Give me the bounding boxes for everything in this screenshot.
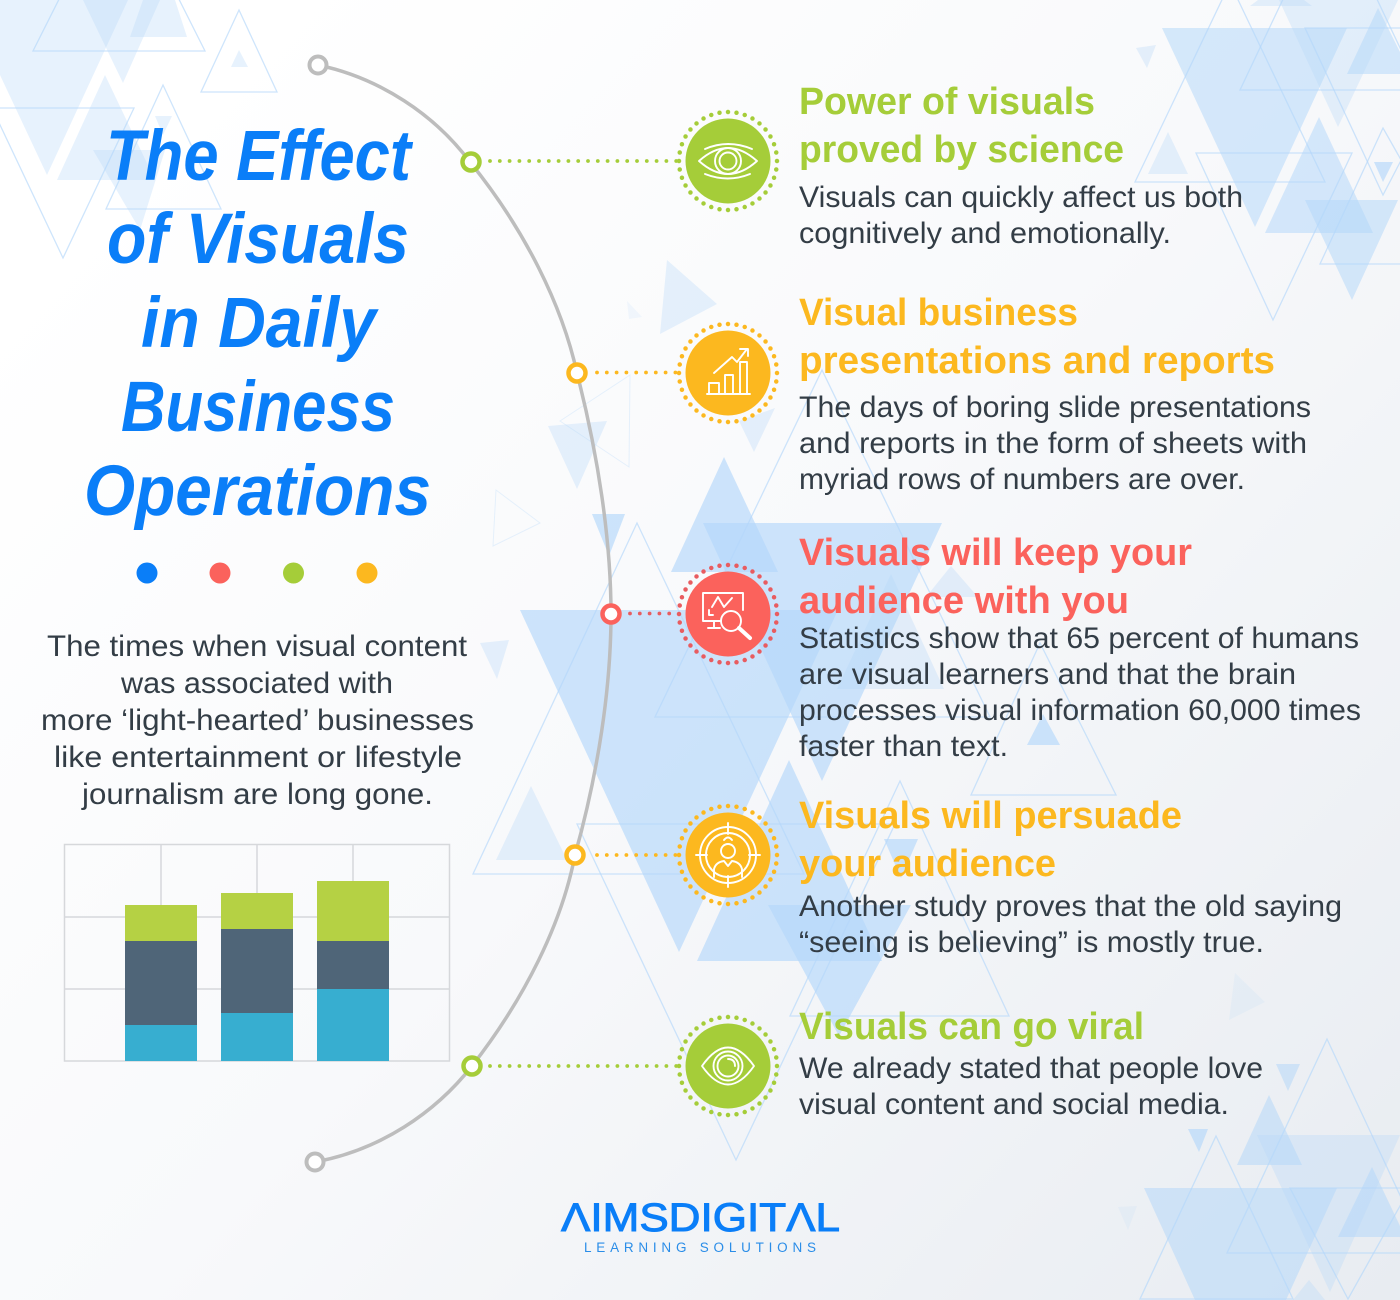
description: Another study proves that the old saying [799,890,1342,923]
item 4: persuade your audience [566,795,1342,959]
description [799,890,1342,959]
title: Operations [84,452,431,531]
heading: Power of visuals [799,81,1095,123]
intro text: The times when visual content [47,630,467,663]
heading: presentations and reports [799,340,1275,382]
intro text [41,630,474,811]
heading [799,81,1124,171]
item 5: go viral [464,1006,1263,1121]
description: and reports in the form of sheets with [799,427,1307,460]
title: The Effect [106,117,414,196]
intro text: like entertainment or lifestyle [54,741,462,774]
heading: audience with you [799,580,1129,622]
intro text: journalism are long gone. [81,778,433,811]
arc end node: bottom [306,1154,324,1170]
heading: your audience [799,843,1056,885]
heading [799,532,1192,622]
heading: proved by science [799,129,1124,171]
intro text: more ‘light-hearted’ businesses [41,704,474,737]
description: visual content and social media. [799,1088,1229,1121]
title: in Daily [141,284,379,363]
description [799,622,1361,763]
intro text: was associated with [120,667,393,700]
description: myriad rows of numbers are over. [799,463,1245,496]
icon: growth chart [707,349,750,394]
icon: eye [699,144,757,178]
description [799,181,1243,250]
description: processes visual information 60,000 times [799,694,1361,727]
heading [799,795,1182,885]
logo: AIMS Digital [561,1196,840,1255]
curved timeline arc [315,65,611,1162]
description: Statistics show that 65 percent of humans [799,622,1359,655]
arc end node: top [310,56,326,74]
heading [799,292,1275,382]
logo: AIMS Digital: LEARNING SOLUTIONS [584,1240,816,1255]
stacked bar chart [64,844,450,1061]
description [799,391,1311,496]
title: Business [121,368,395,447]
item 3: keep your audience [602,532,1361,763]
four coloured dots [136,562,378,584]
heading: Visuals will persuade [799,795,1182,837]
heading: Visual business [799,292,1078,334]
description: We already stated that people love [799,1052,1263,1085]
description: faster than text. [799,730,1008,763]
description: The days of boring slide presentations [799,391,1311,424]
heading: Visuals can go viral [799,1006,1144,1048]
item 1: power of visuals [462,81,1243,250]
heading: Visuals will keep your [799,532,1192,574]
item 2: business presentations [568,292,1311,496]
description: are visual learners and that the brain [799,658,1296,691]
icon: monitor and magnifier [703,593,750,638]
icon: person in target [696,823,760,887]
title [84,117,431,531]
icon: eye [702,1048,754,1084]
description: Visuals can quickly affect us both [799,181,1243,214]
title: of Visuals [107,200,409,279]
description: cognitively and emotionally. [799,217,1171,250]
description [799,1052,1263,1121]
description: “seeing is believing” is mostly true. [799,926,1264,959]
logo: AIMS Digital: ΛIMSDIGITΛL [561,1196,840,1240]
